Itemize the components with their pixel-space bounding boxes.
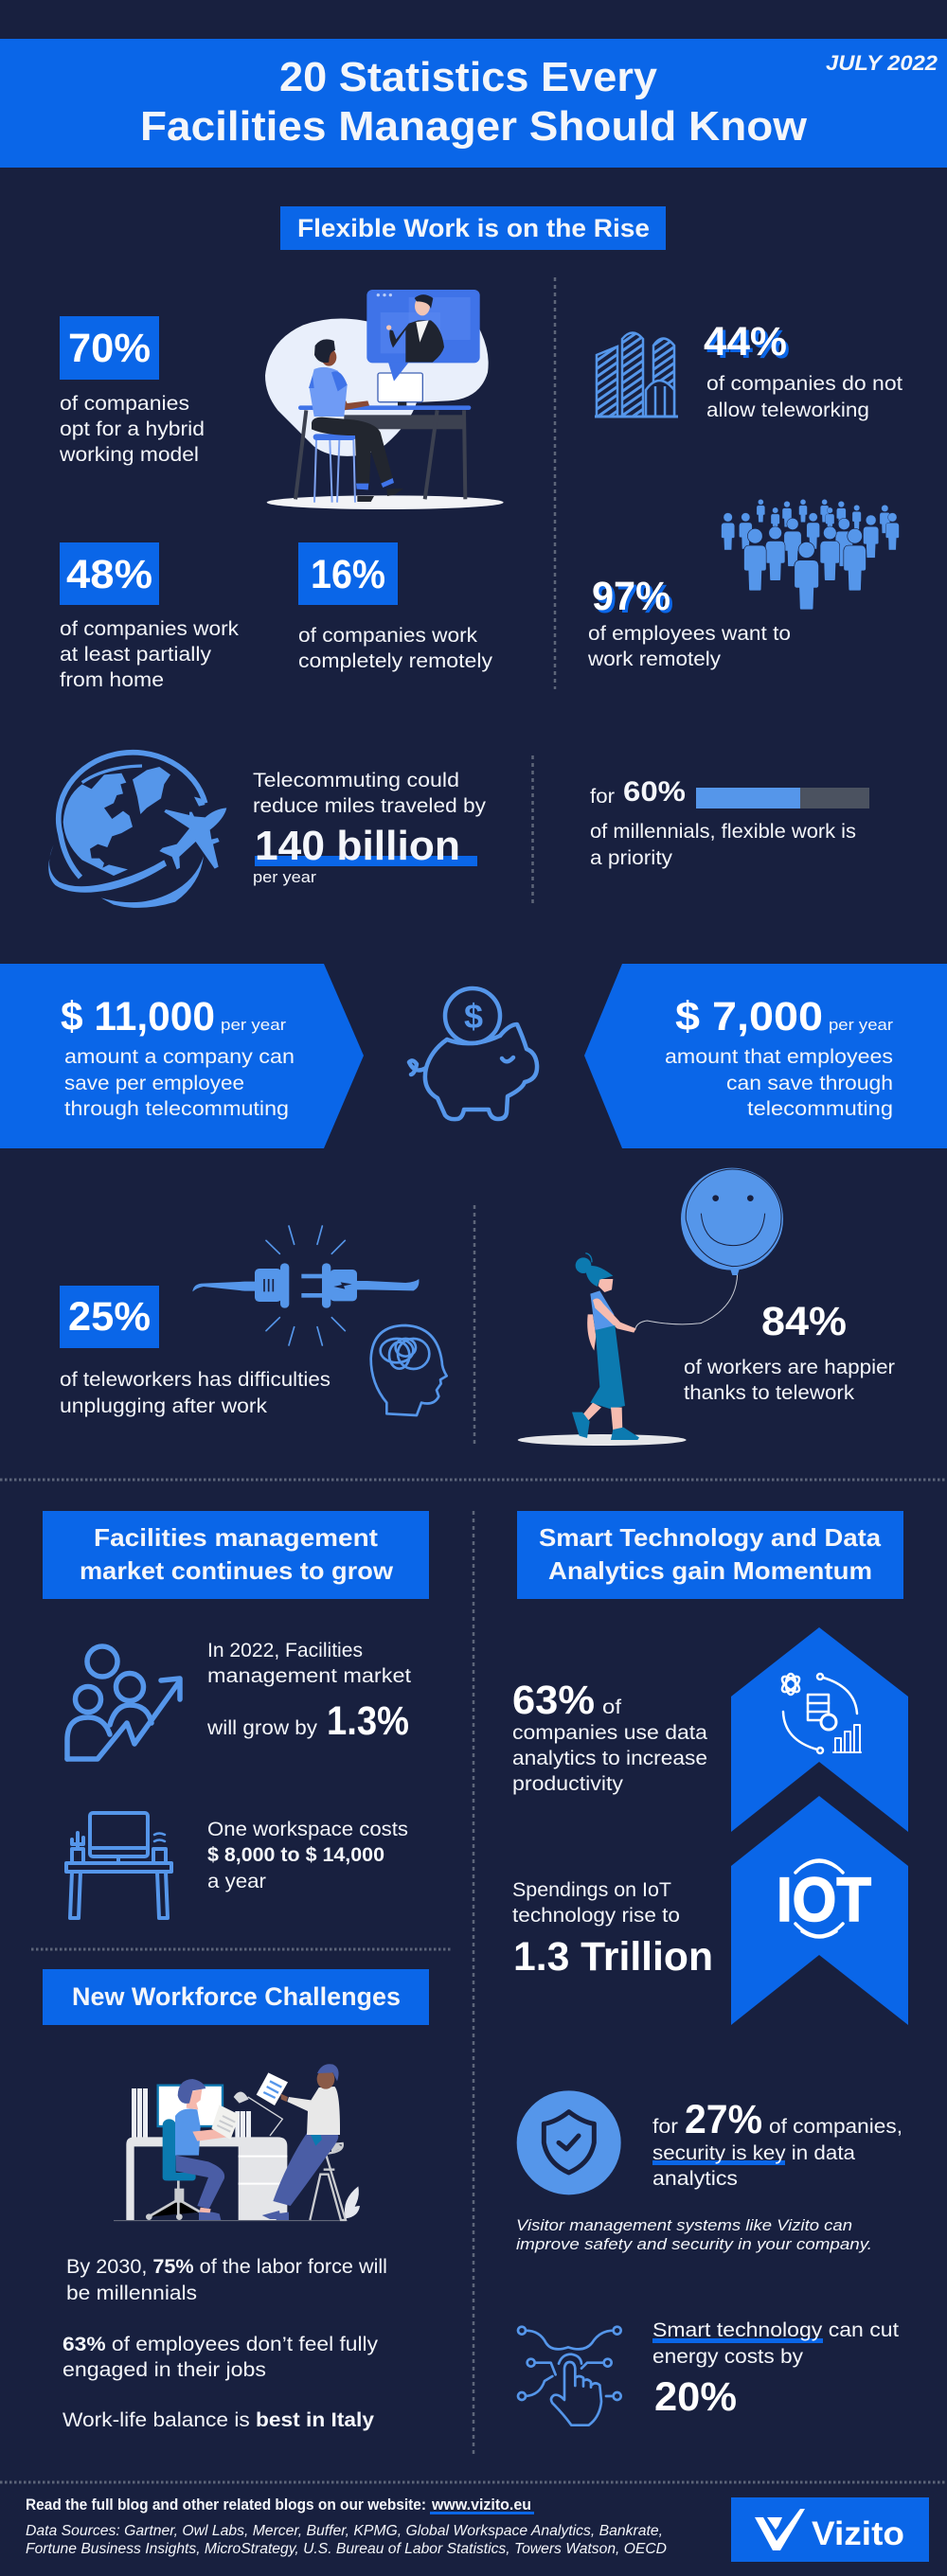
panel: employee savings <box>584 964 947 1148</box>
stat: 63% use data analytics: companies use data <box>512 1722 707 1744</box>
logo: Vizito: Vizito <box>812 2515 904 2552</box>
panel: company savings: $ 11,000 <box>61 994 215 1039</box>
panel: company savings: save per employee <box>64 1073 244 1094</box>
logo: Vizito <box>731 2497 929 2562</box>
icon: piggy bank <box>409 988 537 1119</box>
stat: 27% security: 27% <box>685 2097 762 2142</box>
stat: IoT spending <box>512 1879 713 1980</box>
stat: 84% happier: of workers are happier <box>684 1357 895 1378</box>
icon: analytics <box>779 1674 861 1753</box>
stat: 97% want remote: of employees want to <box>588 623 791 645</box>
section heading: workforce challenges <box>43 1969 429 2025</box>
stat: market growth 1.3%: 1.3% <box>327 1698 409 1744</box>
chevron: IoT <box>731 1796 908 2025</box>
stat: 25% difficulties unplugging: of teleworkers has difficulties <box>60 1369 331 1391</box>
stat: 63% not engaged: 63% of employees don’t feel fully <box>63 2334 379 2355</box>
footer: data sources: Fortune Business Insights, MicroStrategy, U.S. Bureau of Labor Statistics, Towers Watson, OECD <box>26 2541 667 2557</box>
stat: 44% no teleworking: 44% <box>704 319 787 364</box>
stat: 16% completely remote: of companies work <box>298 625 478 647</box>
stat: 97% want remote <box>587 574 791 670</box>
panel: employee savings: per year <box>829 1016 893 1034</box>
stat: 63% use data analytics: analytics to increase <box>512 1748 707 1769</box>
stat: 63% use data analytics <box>512 1678 707 1795</box>
icon: team with growth arrow <box>67 1646 180 1759</box>
title <box>140 54 808 150</box>
stat: 84% happier: thanks to telework <box>684 1382 855 1404</box>
stat: 60% millennials with bar: of millennials, flexible work is <box>590 821 856 843</box>
panel: company savings: through telecommuting <box>64 1098 289 1120</box>
section heading: workforce challenges: New Workforce Challenges <box>72 1982 401 2011</box>
stat: 25% difficulties unplugging: unplugging after work <box>60 1395 268 1417</box>
stat: 97% want remote: 97% <box>592 574 670 619</box>
section heading: smart technology: Smart Technology and Data <box>539 1523 882 1552</box>
stat: 16% completely remote: completely remotely <box>298 650 493 672</box>
stat: market growth 1.3%: In 2022, Facilities <box>207 1640 363 1661</box>
section heading: flexible work <box>280 206 666 250</box>
stat: 25% difficulties unplugging <box>60 1286 331 1417</box>
illustration: video call at desk <box>265 290 504 509</box>
panel: employee savings: telecommuting <box>747 1098 893 1120</box>
section heading: facilities market: market continues to grow <box>80 1556 394 1585</box>
stat: 70% hybrid <box>59 316 205 466</box>
stat: 70% hybrid: opt for a hybrid <box>60 418 205 440</box>
icon: desk with monitor <box>66 1813 171 1918</box>
stat: 97% want remote: work remotely <box>587 648 722 670</box>
stat: 20% energy costs: Smart technology can cut <box>652 2319 899 2341</box>
stat: 84% happier: 84% <box>761 1299 847 1344</box>
panel: company savings <box>0 964 364 1148</box>
stat: 27% security: analytics <box>652 2168 738 2190</box>
stat: 140 billion miles: reduce miles traveled by <box>253 795 487 817</box>
panel: company savings: per year <box>221 1016 286 1034</box>
section heading: facilities market: Facilities management <box>94 1523 378 1552</box>
note: visitor management: Visitor management systems like Vizito can <box>516 2216 852 2234</box>
stat: market growth 1.3% <box>206 1640 411 1744</box>
stat: 48% partially from home: from home <box>60 669 164 691</box>
stat: workspace cost: a year <box>207 1871 266 1892</box>
stat: 63% not engaged: engaged in their jobs <box>63 2359 266 2381</box>
stat: 75% millennials: By 2030, 75% of the labor force will <box>66 2256 387 2278</box>
icon: piggy bank: $ <box>464 997 483 1036</box>
stat: 48% partially from home: of companies work <box>60 618 240 640</box>
chevron: data analytics <box>731 1627 908 1832</box>
illustration: office workers <box>114 2064 360 2221</box>
stat: IoT spending: Spendings on IoT <box>512 1879 671 1901</box>
stat: 20% energy costs: 20% <box>654 2374 737 2420</box>
icon: unplugged cable with sparks <box>192 1226 419 1345</box>
stat: 140 billion miles <box>253 770 487 886</box>
stat: 75% millennials <box>66 2256 387 2304</box>
section heading: facilities market <box>43 1511 429 1599</box>
stat: 44% no teleworking <box>704 319 902 421</box>
stat: 16% completely remote <box>298 542 493 672</box>
stat: 20% energy costs: energy costs by <box>652 2346 804 2368</box>
panel: employee savings: amount that employees <box>665 1046 893 1068</box>
stat: market growth 1.3%: will grow by <box>206 1717 318 1739</box>
title: Facilities Manager Should Know <box>140 103 808 150</box>
stat: 140 billion miles: per year <box>253 868 316 886</box>
stat: 44% no teleworking: of companies do not <box>706 373 902 395</box>
stat: work-life balance: Work-life balance is best in Italy <box>63 2409 374 2431</box>
footer: data sources <box>26 2523 667 2557</box>
stat: 16% completely remote: 16% <box>311 552 385 597</box>
section heading: smart technology <box>517 1511 903 1599</box>
illustration: woman with smiley balloon <box>518 1168 783 1446</box>
stat: 20% energy costs <box>652 2319 899 2420</box>
stat: 27% security: of companies, <box>769 2116 902 2138</box>
stat: 60% millennials with bar <box>590 776 869 869</box>
stat: 70% hybrid: 70% <box>68 326 151 371</box>
stat: 27% security: security is key in data <box>652 2142 855 2164</box>
icon: security shield <box>517 2090 621 2194</box>
stat: 84% happier <box>684 1299 895 1404</box>
footer: blog link: www.vizito.eu <box>431 2496 531 2514</box>
stat: 63% use data analytics: 63% <box>512 1678 595 1723</box>
stat: 48% partially from home <box>60 542 240 691</box>
icon: IOT mark: IOT <box>777 1864 871 1934</box>
stat: 44% no teleworking: allow teleworking <box>706 400 869 421</box>
stat: 25% difficulties unplugging: 25% <box>68 1294 151 1340</box>
stat: market growth 1.3%: management market <box>207 1665 411 1687</box>
stat: 70% hybrid: of companies <box>60 393 189 415</box>
stat: 63% use data analytics: productivity <box>512 1773 624 1795</box>
date: JULY 2022 <box>826 51 938 75</box>
title: 20 Statistics Every <box>279 54 658 100</box>
stat: 60% millennials with bar: a priority <box>590 847 673 869</box>
panel: company savings: amount a company can <box>64 1046 295 1068</box>
stat: 63% not engaged <box>63 2334 379 2381</box>
header banner <box>0 39 947 168</box>
section heading: flexible work: Flexible Work is on the Rise <box>297 214 650 242</box>
stat: 48% partially from home: at least partially <box>60 644 212 666</box>
stat: 70% hybrid: working model <box>59 444 199 466</box>
note: visitor management <box>516 2216 872 2253</box>
stat: IoT spending: 1.3 Trillion <box>513 1934 713 1980</box>
icon: skyscrapers <box>595 333 678 417</box>
note: visitor management: improve safety and security in your company. <box>516 2235 872 2253</box>
stat: workspace cost: One workspace costs <box>207 1819 408 1840</box>
stat: 63% use data analytics: of <box>602 1697 621 1718</box>
footer: blog link: Read the full blog and other related blogs on our website: <box>26 2496 426 2514</box>
stat: 27% security: for <box>652 2116 678 2138</box>
stat: 140 billion miles: 140 billion <box>255 823 460 869</box>
icon: globe with airplane <box>48 753 226 908</box>
stat: workspace cost <box>207 1819 408 1892</box>
stat: IoT spending: technology rise to <box>512 1905 680 1927</box>
icon: head with tangled mind <box>371 1325 447 1415</box>
stat: 60% millennials with bar: 60% <box>623 776 686 808</box>
panel: employee savings: $ 7,000 <box>675 994 823 1039</box>
stat: 75% millennials: be millennials <box>66 2283 197 2304</box>
icon: hand touching circuit <box>518 2327 621 2425</box>
footer: data sources: Data Sources: Gartner, Owl Labs, Mercer, Buffer, KPMG, Global Workspace Analytics, Bankrate, <box>26 2523 663 2539</box>
stat: 27% security <box>652 2097 902 2190</box>
panel: employee savings: can save through <box>726 1073 893 1094</box>
section heading: smart technology: Analytics gain Momentum <box>548 1556 872 1585</box>
stat: 48% partially from home: 48% <box>66 552 152 597</box>
stat: 140 billion miles: Telecommuting could <box>253 770 459 791</box>
stat: workspace cost: $ 8,000 to $ 14,000 <box>207 1844 384 1866</box>
icon: crowd of people <box>722 499 899 610</box>
stat: 60% millennials with bar: for <box>590 786 615 808</box>
